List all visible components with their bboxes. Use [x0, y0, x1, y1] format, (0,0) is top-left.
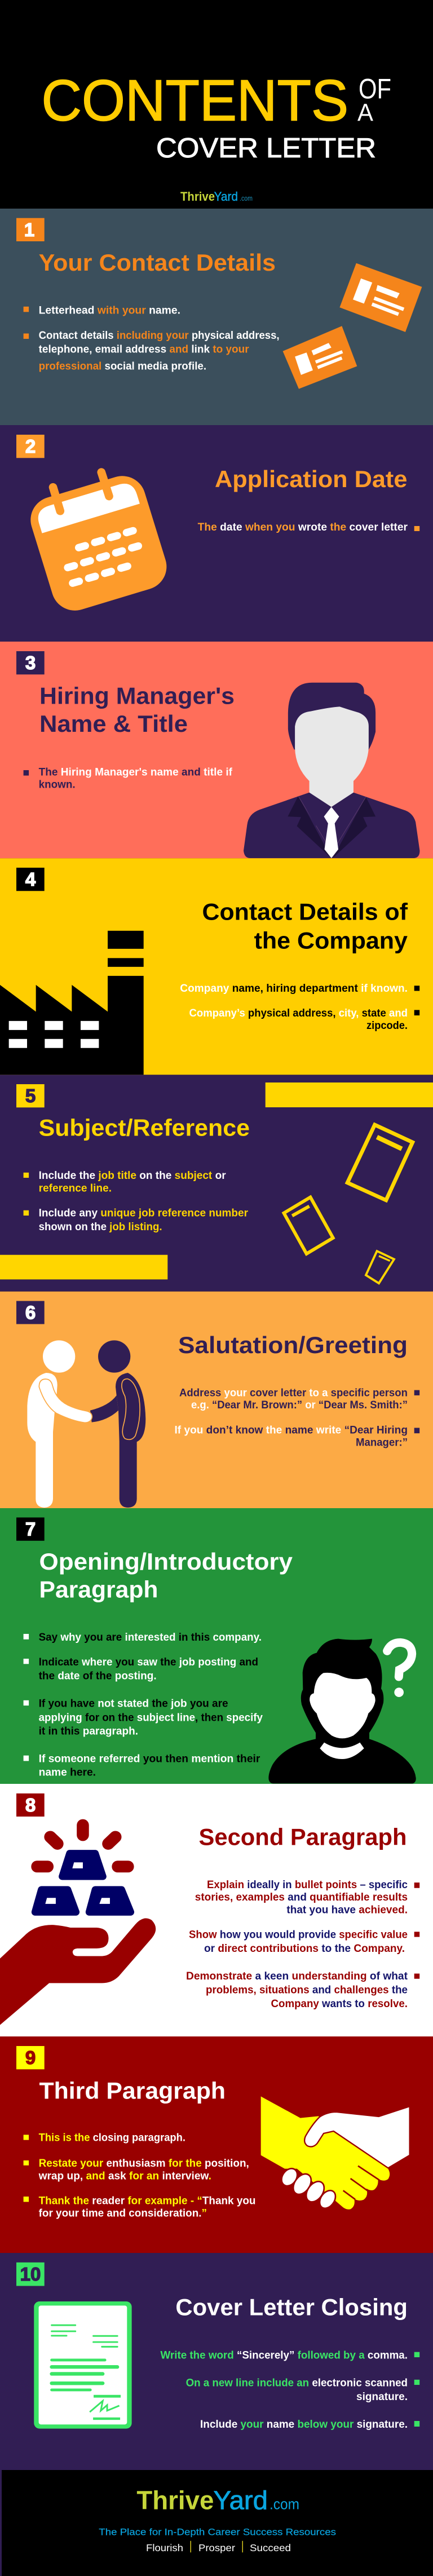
- bullet text: contact details: Contact details including your physical address,: [39, 330, 280, 342]
- bullet text: company address: Company’s physical address, city, state and: [189, 1008, 408, 1019]
- bullet text: letterhead: Letterhead with your name.: [39, 304, 180, 316]
- bullet text: the hiring manager: The Hiring Manager's name and title if: [39, 767, 233, 779]
- panel: 7 opening paragraph: [0, 1508, 433, 1784]
- footer values: flourish prosper succeed: Prosper: [198, 2542, 235, 2553]
- panel: 4 contact details of the company: [0, 858, 433, 1075]
- bullet text: job not stated: it in this paragraph.: [39, 1725, 138, 1737]
- footer values: flourish prosper succeed: [146, 2541, 291, 2553]
- header panel: [0, 0, 433, 209]
- logo: thriveyard large: Yard: [213, 2485, 268, 2515]
- bullet text: job not stated: [24, 1698, 263, 1737]
- icon: documents: [284, 1125, 413, 1283]
- bullet text: restate: wrap up, and ask for an interview.: [38, 2171, 211, 2182]
- bullet text: indicate where: [24, 1656, 258, 1682]
- heading: opening introductory paragraph: [39, 1548, 293, 1602]
- heading: application date: Application Date: [215, 466, 407, 492]
- badge 1: 1: [24, 219, 34, 240]
- icon: calendar: [25, 470, 173, 616]
- bullet text: job title: reference line.: [39, 1182, 112, 1194]
- bullet text: company address: zipcode.: [366, 1020, 408, 1032]
- panel: 3 hiring manager: [0, 642, 433, 858]
- badge 9: 9: [25, 2047, 36, 2068]
- bullet text: sincerely: Write the word “Sincerely” followed by a comma.: [160, 2350, 408, 2361]
- icon: business cards: [283, 263, 422, 389]
- bullet text: show: or direct contributions to the Company.: [204, 1943, 405, 1955]
- footer panel: [0, 2470, 433, 2576]
- bullet text: reference number: [24, 1207, 249, 1233]
- bullet text: signature: On a new line include an electronic scanned: [186, 2377, 408, 2389]
- heading: third paragraph: Third Paragraph: [39, 2077, 226, 2104]
- bullet text: contact details: professional social media profile.: [39, 360, 206, 372]
- badge 10: 10: [20, 2264, 41, 2285]
- bullet text: explain: stories, examples and quantifiable results: [195, 1892, 408, 1903]
- badge 7: [16, 1518, 45, 1541]
- panel: 5 subject reference: [0, 1075, 433, 1292]
- bullet text: address: Address your cover letter to a specific person: [179, 1387, 408, 1399]
- heading: hiring manager's name and title: [39, 683, 235, 737]
- badge 2: 2: [25, 436, 36, 457]
- bullet text: reference number: Include any unique job reference number: [39, 1207, 249, 1219]
- bullet text: job not stated: applying for on the subject line, then specify: [39, 1712, 263, 1724]
- panel: 9 third paragraph: [0, 2036, 433, 2253]
- icon: hand with gold bars: [0, 1819, 156, 2025]
- footer values: flourish prosper succeed: Succeed: [250, 2542, 291, 2553]
- icon: manager in suit: [244, 683, 419, 858]
- heading: hiring manager's name and title: Hiring Manager's: [39, 683, 235, 709]
- badge 7: 7: [25, 1519, 36, 1539]
- heading: contact details of the company: [202, 899, 408, 953]
- logo: thriveyard small: [180, 189, 253, 204]
- logo: thriveyard small: Thrive: [180, 189, 215, 204]
- heading: subject reference: Subject/Reference: [39, 1114, 250, 1141]
- heading: opening introductory paragraph: Paragraph: [39, 1576, 158, 1602]
- bullet text: address: e.g. “Dear Mr. Brown:” or “Dear Ms. Smith:”: [191, 1399, 408, 1411]
- badge 10: [16, 2263, 45, 2286]
- bullet text: company address: [189, 1008, 419, 1032]
- badge 4: 4: [25, 869, 36, 890]
- bullet text: closing paragraph: This is the closing paragraph.: [39, 2132, 185, 2144]
- badge 3: 3: [25, 652, 36, 673]
- bullet text: indicate where: Indicate where you saw the job posting and: [39, 1656, 258, 1668]
- bullet text: contact details: [24, 330, 280, 372]
- badge 5: [16, 1084, 45, 1107]
- tagline: The Place for In-Depth Career Success Resources: [99, 2526, 336, 2537]
- bullet text: unknown name: If you don’t know the name write “Dear Hiring: [175, 1425, 408, 1437]
- bullet text: the hiring manager: known.: [39, 779, 76, 790]
- bullet text: explain: Explain ideally in bullet points – specific: [207, 1879, 408, 1891]
- bullet text: contact details: telephone, email address and link to your: [39, 344, 249, 356]
- bullet text: restate: Restate your enthusiasm for the position,: [39, 2158, 249, 2170]
- bullet text: restate: [24, 2158, 249, 2182]
- heading: contact details of the company: Contact Details of: [202, 899, 408, 925]
- badge 8: 8: [25, 1795, 36, 1815]
- title: contents of a: OF: [359, 73, 391, 105]
- logo: thriveyard small: .com: [240, 194, 253, 202]
- bullet text: show: Show how you would provide specific value: [189, 1929, 408, 1941]
- bullet text: signature: signature.: [356, 2391, 408, 2403]
- bullet text: show: [189, 1929, 419, 1955]
- bullet text: referral: name here.: [39, 1767, 96, 1778]
- bullet text: job title: Include the job title on the subject or: [39, 1170, 226, 1182]
- panel: 6 salutation greeting: [0, 1292, 433, 1508]
- bullet text: explain: [195, 1879, 419, 1916]
- subtitle: cover letter: COVER LETTER: [156, 133, 376, 164]
- heading: second paragraph: Second Paragraph: [198, 1824, 407, 1850]
- icon: factory: [0, 931, 144, 1075]
- badge 1: [16, 218, 45, 241]
- bullet text: company name: Company name, hiring department if known.: [180, 983, 408, 995]
- bullet text: say why: Say why you are interested in this company.: [39, 1632, 262, 1643]
- bullet text: explain: that you have achieved.: [286, 1904, 408, 1916]
- title: contents of a: A: [357, 99, 374, 127]
- bullet text: the date: The date when you wrote the cover letter: [198, 522, 408, 533]
- logo: thriveyard large: Thrive: [136, 2485, 214, 2515]
- yellow bar top right: [266, 1082, 433, 1107]
- badge 2: [16, 435, 45, 458]
- bullet text: reference number: shown on the job listing.: [39, 1221, 162, 1233]
- yellow bar bottom left: [0, 1255, 167, 1279]
- bullet text: the hiring manager: [24, 767, 233, 790]
- bullet text: thank: Thank the reader for example - “Thank you: [39, 2195, 255, 2207]
- heading: hiring manager's name and title: Name & Title: [39, 710, 188, 737]
- badge 4: [16, 868, 45, 891]
- heading: opening introductory paragraph: Opening/Introductory: [39, 1548, 293, 1575]
- icon: person with question mark: [268, 1639, 416, 1783]
- bullet text: thank: [24, 2195, 255, 2219]
- bullet text: signature: [186, 2377, 419, 2403]
- title: contents of a: CONTENTS: [42, 68, 348, 133]
- logo: thriveyard small: Yard: [214, 189, 238, 204]
- panel: 10 cover letter closing: [0, 2253, 433, 2470]
- bullet text: demonstrate: Company wants to resolve.: [271, 1998, 408, 2010]
- badge 6: 6: [25, 1302, 36, 1323]
- bullet text: address: [179, 1387, 419, 1411]
- badge 6: [16, 1301, 45, 1324]
- icon: handshake: [261, 2096, 410, 2211]
- icon: signed letter: [34, 2301, 132, 2429]
- bullet text: unknown name: [175, 1425, 419, 1449]
- badge 9: [16, 2046, 45, 2069]
- icon: two people shaking hands: [27, 1340, 145, 1508]
- badge 3: [16, 651, 45, 674]
- bullet text: name: Include your name below your signature.: [200, 2419, 408, 2431]
- bullet text: job not stated: If you have not stated the job you are: [39, 1698, 228, 1709]
- bullet text: unknown name: Manager:”: [356, 1437, 408, 1449]
- heading: salutation greeting: Salutation/Greeting: [178, 1332, 408, 1358]
- heading: cover letter closing: Cover Letter Closing: [175, 2294, 408, 2321]
- bullet text: indicate where: the date of the posting.: [39, 1670, 157, 1682]
- footer values: flourish prosper succeed: Flourish: [146, 2542, 183, 2553]
- panel: 8 second paragraph: [0, 1784, 433, 2036]
- bullet text: thank: for your time and consideration.”: [39, 2207, 207, 2219]
- logo: thriveyard large: [136, 2485, 299, 2515]
- bullet text: demonstrate: problems, situations and challenges the: [206, 1984, 408, 1996]
- badge 5: 5: [25, 1085, 36, 1106]
- badge 8: [16, 1793, 45, 1817]
- bullet text: demonstrate: [186, 1970, 419, 2010]
- logo: thriveyard large: .com: [269, 2495, 299, 2512]
- heading: contact details of the company: the Company: [254, 927, 408, 953]
- bullet text: referral: [24, 1753, 260, 1778]
- bullet text: referral: If someone referred you then mention their: [39, 1753, 260, 1765]
- bullet text: job title: [24, 1170, 226, 1194]
- panel: 2 application date: [0, 425, 433, 642]
- bullet text: demonstrate: Demonstrate a keen understanding of what: [186, 1970, 408, 1982]
- panel: 1 your contact details: [0, 209, 433, 425]
- heading: your contact details: Your Contact Details: [39, 249, 276, 276]
